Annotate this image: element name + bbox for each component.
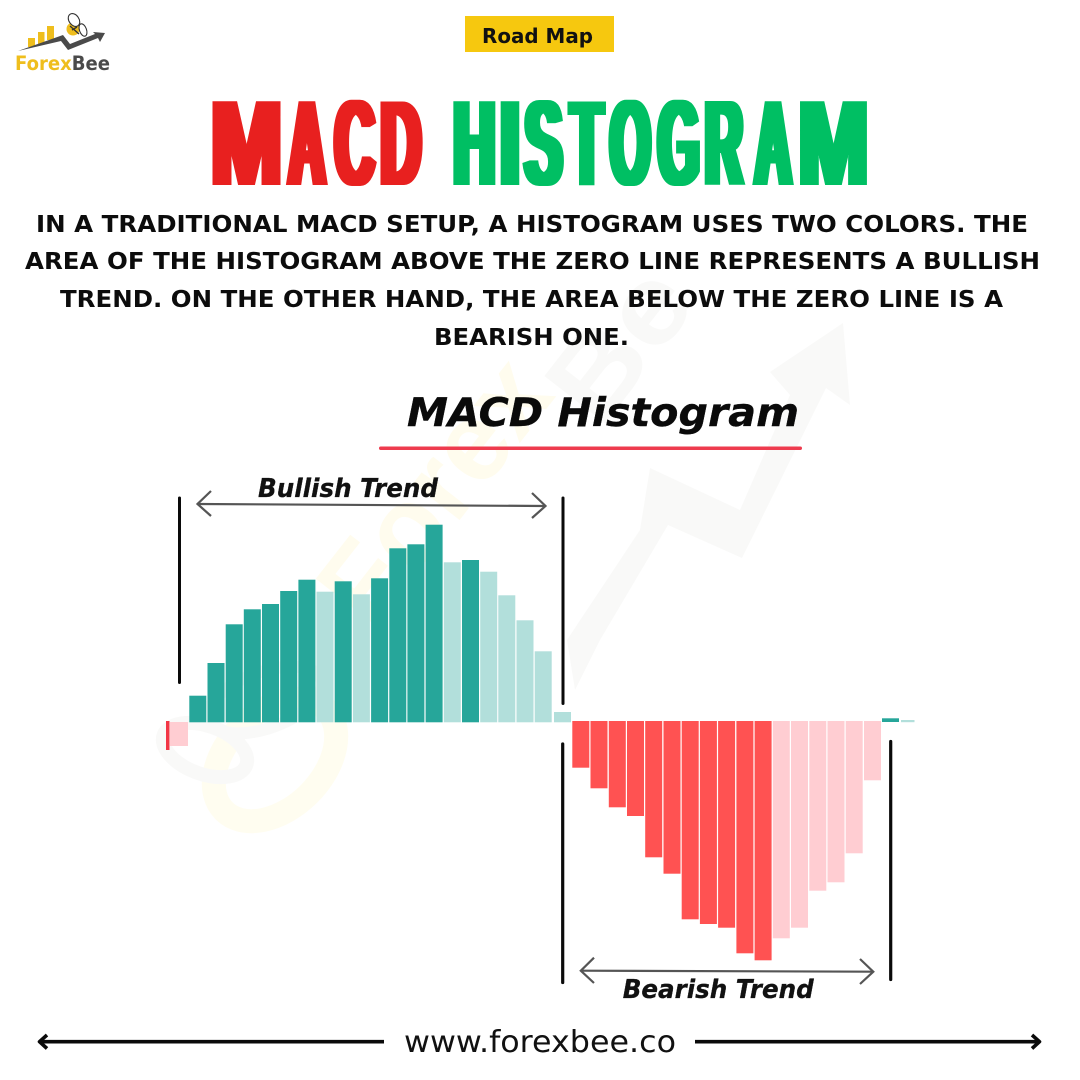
bar chart: bullish histogram (189, 525, 571, 722)
title: MACD Histogram: G (658, 75, 699, 211)
chart heading: MACD Histogram (379, 390, 802, 450)
badge: Road Map: Road Map (482, 24, 593, 48)
logo wordmark: ForexBee (15, 52, 110, 75)
title: MACD Histogram: R (705, 75, 742, 211)
bar chart: bearish histogram (572, 721, 881, 960)
badge: Road Map (465, 16, 614, 52)
label: Bullish Trend: Bullish Trend (258, 474, 439, 504)
arrow: bearish range (580, 958, 873, 984)
icon: rising bars (28, 26, 54, 47)
title: MACD Histogram: H (454, 75, 495, 211)
watermark: faint ForexBee logo: Forex (292, 333, 576, 647)
title: MACD Histogram (211, 75, 869, 211)
text block: explanation: BEARISH ONE. (434, 325, 629, 351)
title: MACD Histogram: C (335, 75, 374, 211)
arrow: bullish range (197, 491, 546, 518)
bars: final positive stub (882, 718, 914, 722)
title: MACD Histogram: M (211, 75, 282, 211)
title: MACD Histogram: S (525, 75, 562, 211)
text block: explanation (25, 212, 1040, 351)
bars: initial negative stub (166, 721, 188, 750)
arrow: footer right (695, 1035, 1040, 1048)
title: MACD Histogram: D (381, 75, 421, 211)
markers: bearish range boundaries (563, 742, 891, 982)
title: MACD Histogram: A (755, 75, 791, 211)
title: MACD Histogram: O (610, 75, 650, 211)
icon: bee (66, 11, 89, 37)
text block: explanation: IN A TRADITIONAL MACD SETUP, A HISTOGRAM USES TWO COLORS. THE (36, 212, 1028, 238)
watermark: faint ForexBee logo: Be (520, 242, 717, 445)
title: MACD Histogram: I (500, 75, 520, 211)
chart heading: MACD Histogram: MACD Histogram (407, 390, 799, 436)
markers: bullish range boundaries (180, 498, 563, 704)
logo: ForexBee (15, 11, 110, 75)
footer: website with arrows (40, 1025, 1040, 1060)
footer url: www.forexbee.co (404, 1025, 676, 1060)
title: MACD Histogram: A (289, 75, 325, 211)
title: MACD Histogram: T (571, 75, 603, 211)
label: Bearish Trend: Bearish Trend (623, 975, 814, 1005)
arrow: footer left (40, 1035, 384, 1048)
text block: explanation: AREA OF THE HISTOGRAM ABOVE THE ZERO LINE REPRESENTS A BULLISH (25, 249, 1040, 275)
title: MACD Histogram: M (798, 75, 869, 211)
watermark: faint ForexBee logo (155, 242, 850, 845)
icon: zigzag arrow (18, 32, 105, 51)
text block: explanation: TREND. ON THE OTHER HAND, THE AREA BELOW THE ZERO LINE IS A (60, 287, 1003, 313)
